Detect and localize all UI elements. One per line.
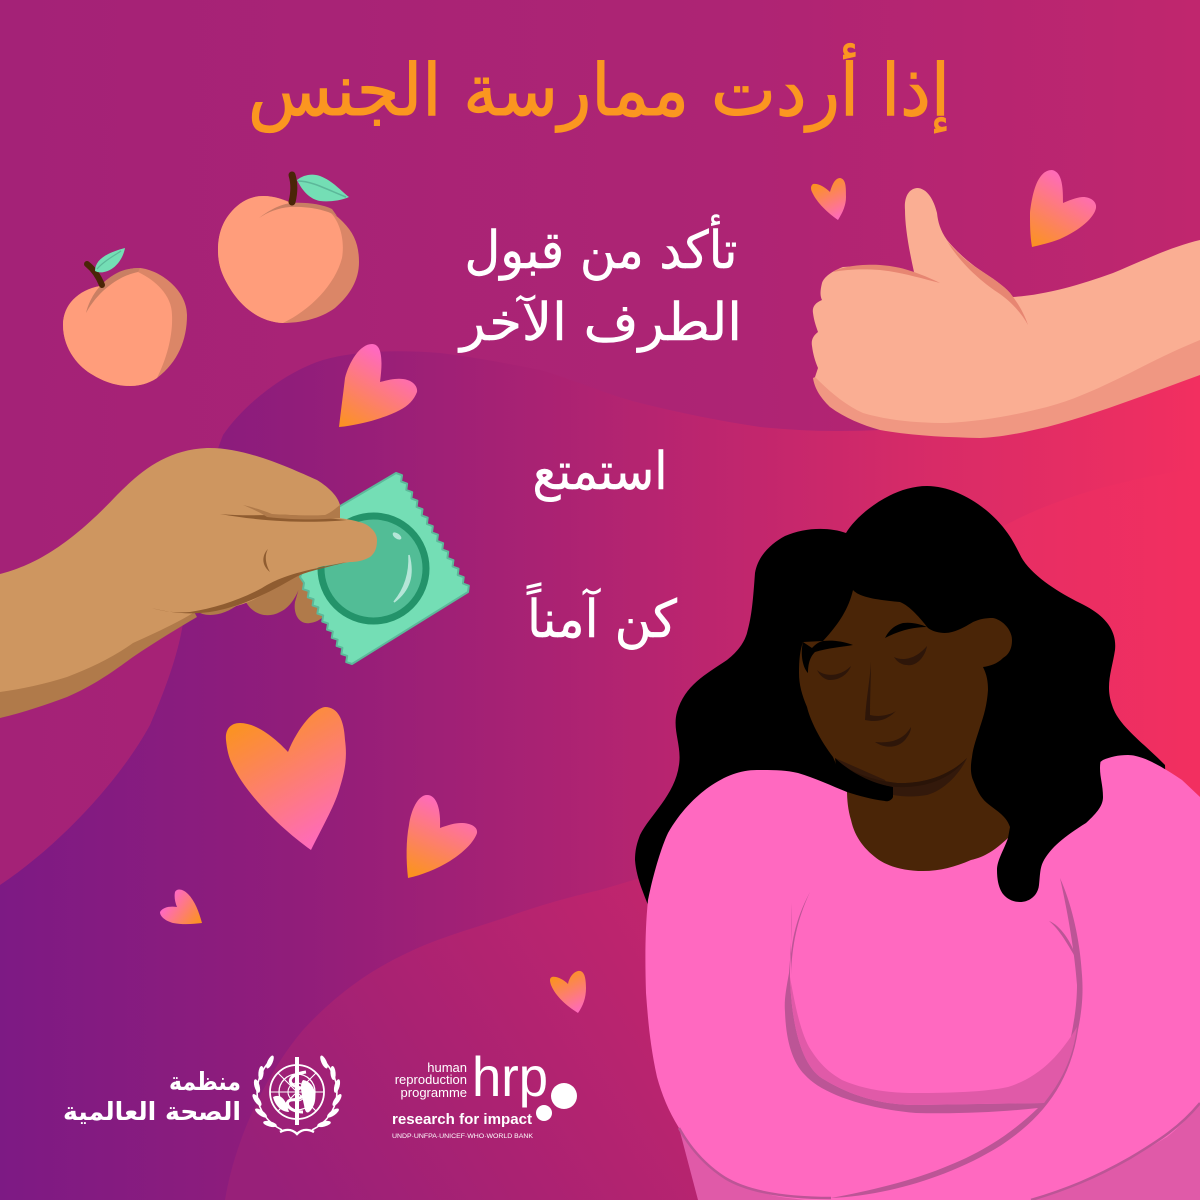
programme name: programme <box>401 1085 467 1100</box>
thumb crease <box>947 241 1028 325</box>
knuckle crease <box>833 265 940 283</box>
hair sliver at temple <box>802 641 853 673</box>
figure: woman with eyes closed <box>635 486 1200 1200</box>
face and neck <box>799 590 1012 871</box>
arm shadow <box>0 610 197 718</box>
hrp wordmark: hrp <box>472 1045 548 1108</box>
icon: hand giving condom <box>0 448 469 718</box>
programme name <box>395 1060 467 1100</box>
text: make sure of consent line 1: تأكد من قبول <box>464 214 738 281</box>
WHO Arabic name: الصحة العالمية <box>63 1097 241 1126</box>
title: إذا أردت ممارسة الجنس <box>248 43 950 133</box>
icon: large heart <box>226 707 346 850</box>
text block: consent and safety messages <box>457 214 742 650</box>
hrp dots <box>551 1083 577 1109</box>
sweater crease right <box>1049 921 1077 960</box>
condom packet <box>300 473 469 664</box>
programme name: human <box>427 1060 467 1075</box>
sleeve edge lines <box>679 1103 1200 1200</box>
nose <box>865 662 896 721</box>
WHO Arabic name: منظمة <box>169 1067 241 1096</box>
hair over shoulder <box>997 745 1110 902</box>
hand <box>812 188 1200 423</box>
sweater fold shading <box>790 977 1077 1105</box>
thumb creases <box>220 514 347 522</box>
text: be safe: كن آمناً <box>526 583 677 650</box>
icon: right peach <box>218 175 359 323</box>
icon: heart top centre right <box>811 178 846 220</box>
right eyebrow <box>885 623 927 638</box>
chin shadow <box>835 758 967 796</box>
sweater <box>645 755 1200 1200</box>
lower sweater shade <box>679 1100 1200 1200</box>
text: make sure of consent line 2: الطرف الآخر <box>457 293 742 353</box>
icon: medium heart lower <box>407 795 477 878</box>
icon: thumbs up hand <box>812 188 1200 438</box>
programme name: reproduction <box>395 1072 467 1087</box>
icon: small heart bottom <box>550 971 586 1013</box>
hand <box>0 448 377 692</box>
icon: heart beside peach <box>339 344 417 427</box>
WHO emblem <box>251 1055 343 1134</box>
icon: heart top right <box>1030 170 1096 247</box>
text: enjoy: استمتع <box>532 442 668 502</box>
WHO Arabic name <box>63 1067 241 1126</box>
co-sponsors: UNDP·UNFPA·UNICEF·WHO·WORLD BANK <box>392 1133 534 1140</box>
research for impact: research for impact <box>392 1111 532 1128</box>
hair strand under chin <box>835 758 893 801</box>
icon: left peach <box>63 248 187 386</box>
fingers behind packet <box>197 570 325 623</box>
icon: small heart left <box>160 890 202 924</box>
arm shadow <box>813 335 1200 438</box>
logo: WHO <box>63 1055 343 1134</box>
mouth <box>875 727 911 747</box>
logo: HRP <box>392 1045 577 1140</box>
sweater fold dark line <box>785 878 1083 1198</box>
eyes <box>817 646 927 680</box>
hair <box>635 486 1170 920</box>
